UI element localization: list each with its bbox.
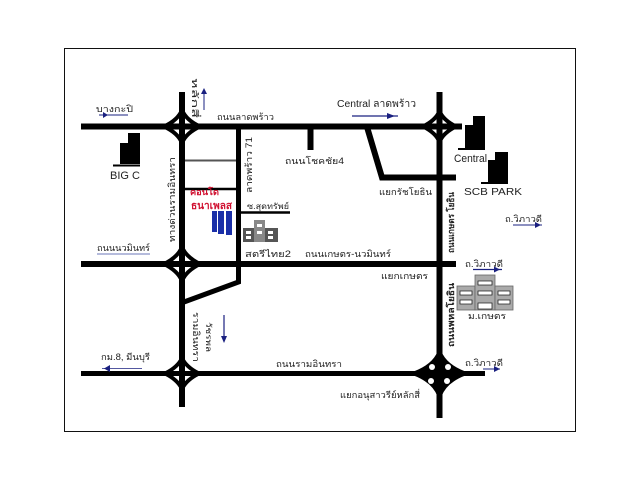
arrow: to Wisawakam lower [483, 366, 500, 372]
road: Soi Chok Chai 4 [308, 127, 314, 150]
label: Wisawakam lower: ถ.วิภาวดี [465, 358, 503, 368]
interchanges [164, 110, 465, 396]
arrow: Ram Intra Wachara Phon south [221, 315, 227, 343]
underline: Nawamin [97, 253, 150, 255]
icon: Big C building [113, 133, 140, 166]
label: Kaset Nawamin south: ถนนพหลโยธิน [445, 282, 456, 347]
interchange: Lat Phrao and Pradit Manutham [164, 110, 200, 143]
label: Pradit Manutham road: ทางด่วนรามอินทรา [167, 157, 177, 242]
arrow: to Bang Kapi [99, 112, 128, 118]
label: Kasetsart University: ม.เกษตร [468, 311, 506, 321]
road: upper cross lane [185, 160, 236, 162]
label: Kaset junction: แยกเกษตร [381, 271, 428, 281]
icon: condo building [212, 211, 232, 235]
label: Wisawakam middle: ถ.วิภาวดี [465, 259, 503, 269]
road: Kaset Nawamin [81, 261, 456, 267]
label: Wachara Phon: วัชรพล [204, 322, 213, 352]
label: Kaset Nawamin north: ถนนเกษตร โยธิน [445, 191, 456, 253]
label: Central: Central [454, 153, 487, 165]
road: condo lane [185, 188, 236, 190]
road: Lat Phrao 71 [184, 127, 238, 302]
label: Ratchayothin junction: แยกรัชโยธิน [379, 187, 432, 197]
arrow: to Min Buri [102, 365, 142, 372]
interchange: Kaset Nawamin and Pradit Manutham [164, 247, 200, 281]
road: Pradit Manutham [179, 92, 185, 407]
label: Soi Chok Chai 4: ถนนโชคชัย4 [285, 156, 344, 166]
road: Kaset Nawamin east expressway [436, 92, 442, 418]
label: Kaset Nawamin to: ถนนนวมินทร์ [97, 242, 150, 253]
road: Soi Sutthiwat [240, 211, 290, 214]
label: Condo name: คอนโด [190, 186, 219, 197]
label: Ram Intra road: ถนนรามอินทรา [276, 359, 342, 369]
label: Ram Intra vertical: รามอินทรา [191, 312, 201, 362]
road network [81, 92, 485, 418]
road: Ram Intra [81, 371, 485, 376]
icon: Sri Prathum school building [243, 220, 278, 242]
arrow: to Hua Mak north [201, 88, 207, 110]
road: Chok Chai junction branch [367, 127, 456, 178]
label: Central Lat Phrao: Central ลาดพร้าว [337, 98, 416, 110]
label: Anusawari junction: แยกอนุสาวรีย์หลักสี่ [340, 388, 421, 401]
interchange: Kaset intersection [414, 352, 465, 396]
label: Sri Prathum school: สตรีไทย2 [245, 249, 291, 259]
arrow: to Wisawakam middle [473, 266, 502, 272]
label: Bang Kapi: บางกะปิ [96, 104, 133, 114]
icon: Kasetsart University building [457, 275, 513, 310]
label: Condo name [190, 186, 233, 212]
label: Lat Phrao road: ถนนลาดพร้าว [217, 112, 274, 122]
label: Soi Lat Phrao 71: ลาดพร้าว 71 [244, 137, 254, 193]
map frame [64, 48, 576, 432]
interchange: Ram Intra and Pradit Manutham [165, 358, 199, 389]
label: SCB Park: SCB PARK [464, 187, 522, 198]
label: Wisawakam east: ถ.วิภาวดี [505, 214, 542, 224]
label: Big C: BIG C [110, 170, 140, 182]
label: Hua Mak: หลักสี่ [190, 78, 202, 119]
label: Soi Sutthiwat: ซ.สุดทรัพย์ [247, 201, 289, 211]
icon: SCB Park building [481, 152, 508, 184]
arrow: to Wisawakam east [513, 222, 542, 228]
label: Min Buri: กม.8, มีนบุรี [101, 352, 150, 363]
label: Kaset Nawamin road: ถนนเกษตร-นวมินทร์ [305, 248, 391, 259]
icon: Central building [458, 116, 485, 150]
road: Lat Phrao [81, 124, 462, 130]
label: Condo name: ธนาเพลส [191, 201, 233, 212]
labels [96, 78, 542, 401]
interchange: Lat Phrao east [423, 111, 456, 142]
arrow: to Central Lat Phrao [352, 113, 398, 119]
